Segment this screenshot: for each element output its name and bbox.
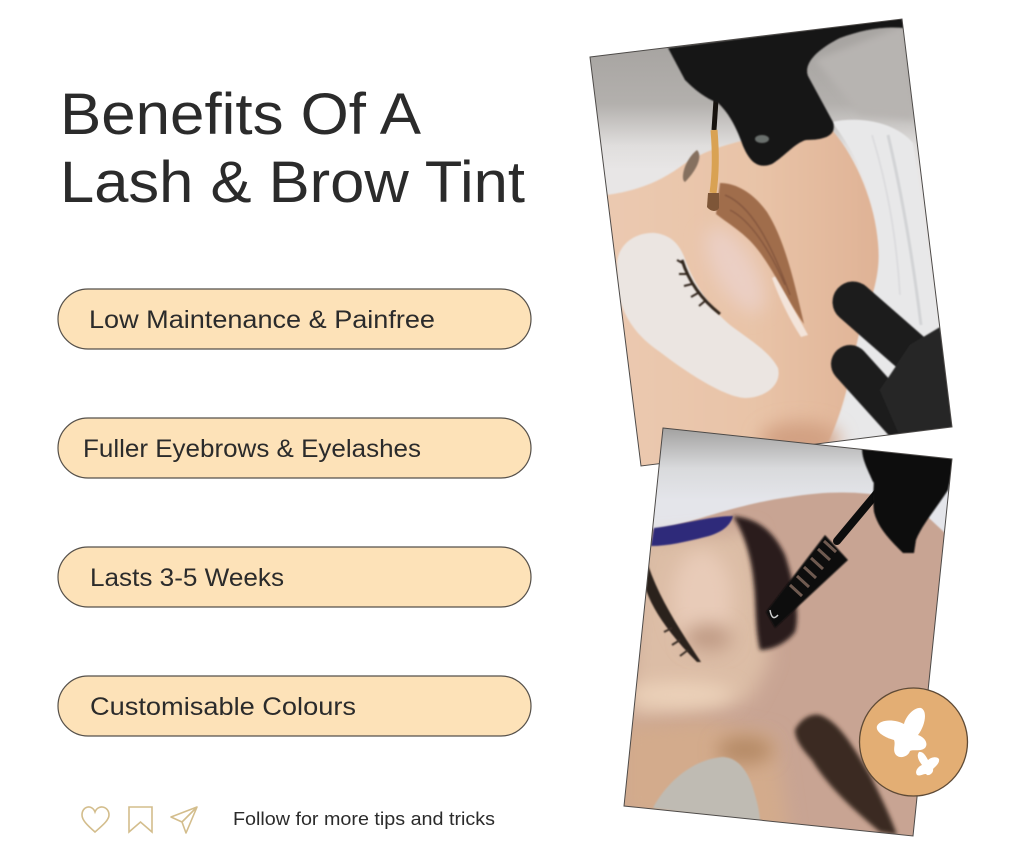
eyelid highlight	[703, 226, 768, 314]
benefit pill: lasts 3-5 weeks	[58, 547, 531, 607]
photo 1 outline	[590, 19, 952, 466]
benefit pill: low maintenance: Low Maintenance & Painfree	[89, 306, 435, 334]
benefit pill: low maintenance	[58, 289, 531, 349]
eye line	[646, 565, 701, 662]
eye pad	[617, 233, 779, 398]
icon: paper plane	[171, 807, 197, 833]
benefit pill: lasts 3-5 weeks: Lasts 3-5 Weeks	[90, 564, 284, 592]
title: Benefits Of A	[60, 82, 421, 147]
blue brow mapping	[651, 516, 733, 546]
bridge highlight	[625, 682, 735, 708]
photo: spoolie brow brushing	[620, 428, 960, 840]
benefit pill: customisable colours	[58, 676, 531, 736]
badge: butterflies	[860, 688, 968, 796]
title	[60, 82, 525, 215]
photo: brow tint application	[590, 18, 956, 470]
far brow	[683, 150, 699, 182]
icon: large butterfly	[877, 708, 926, 757]
eyelid skin	[672, 550, 732, 633]
grey backdrop right	[820, 28, 910, 118]
socket shadow	[684, 624, 732, 652]
icon: small butterfly	[916, 752, 939, 775]
title: Lash & Brow Tint	[60, 150, 525, 215]
benefit pill: fuller brows and lashes: Fuller Eyebrows & Eyelashes	[83, 435, 421, 463]
glove highlight	[755, 135, 769, 143]
icon: bookmark	[129, 807, 152, 832]
spoolie	[766, 493, 877, 628]
follow text: Follow for more tips and tricks	[233, 809, 495, 829]
lower cheek shading	[756, 416, 850, 444]
face skin	[606, 130, 879, 470]
photo 2 outline	[624, 428, 952, 836]
nose and cheek tone	[626, 727, 780, 822]
nose side shadow	[717, 736, 773, 764]
towel	[833, 119, 922, 325]
glove	[862, 448, 955, 553]
lower glove	[850, 302, 956, 436]
brow white outline	[772, 275, 808, 337]
lower eye pad	[653, 757, 760, 823]
lower brow	[795, 715, 897, 835]
benefit pill: fuller brows and lashes	[58, 418, 531, 478]
tinted brow	[716, 183, 804, 324]
benefit pill: customisable colours: Customisable Colours	[90, 693, 356, 721]
left face light	[630, 530, 770, 720]
face skin	[620, 492, 960, 840]
lashes	[677, 260, 720, 314]
icon: heart	[82, 807, 109, 832]
brush	[707, 100, 719, 211]
upper brow	[733, 516, 797, 650]
top glove	[668, 18, 904, 166]
